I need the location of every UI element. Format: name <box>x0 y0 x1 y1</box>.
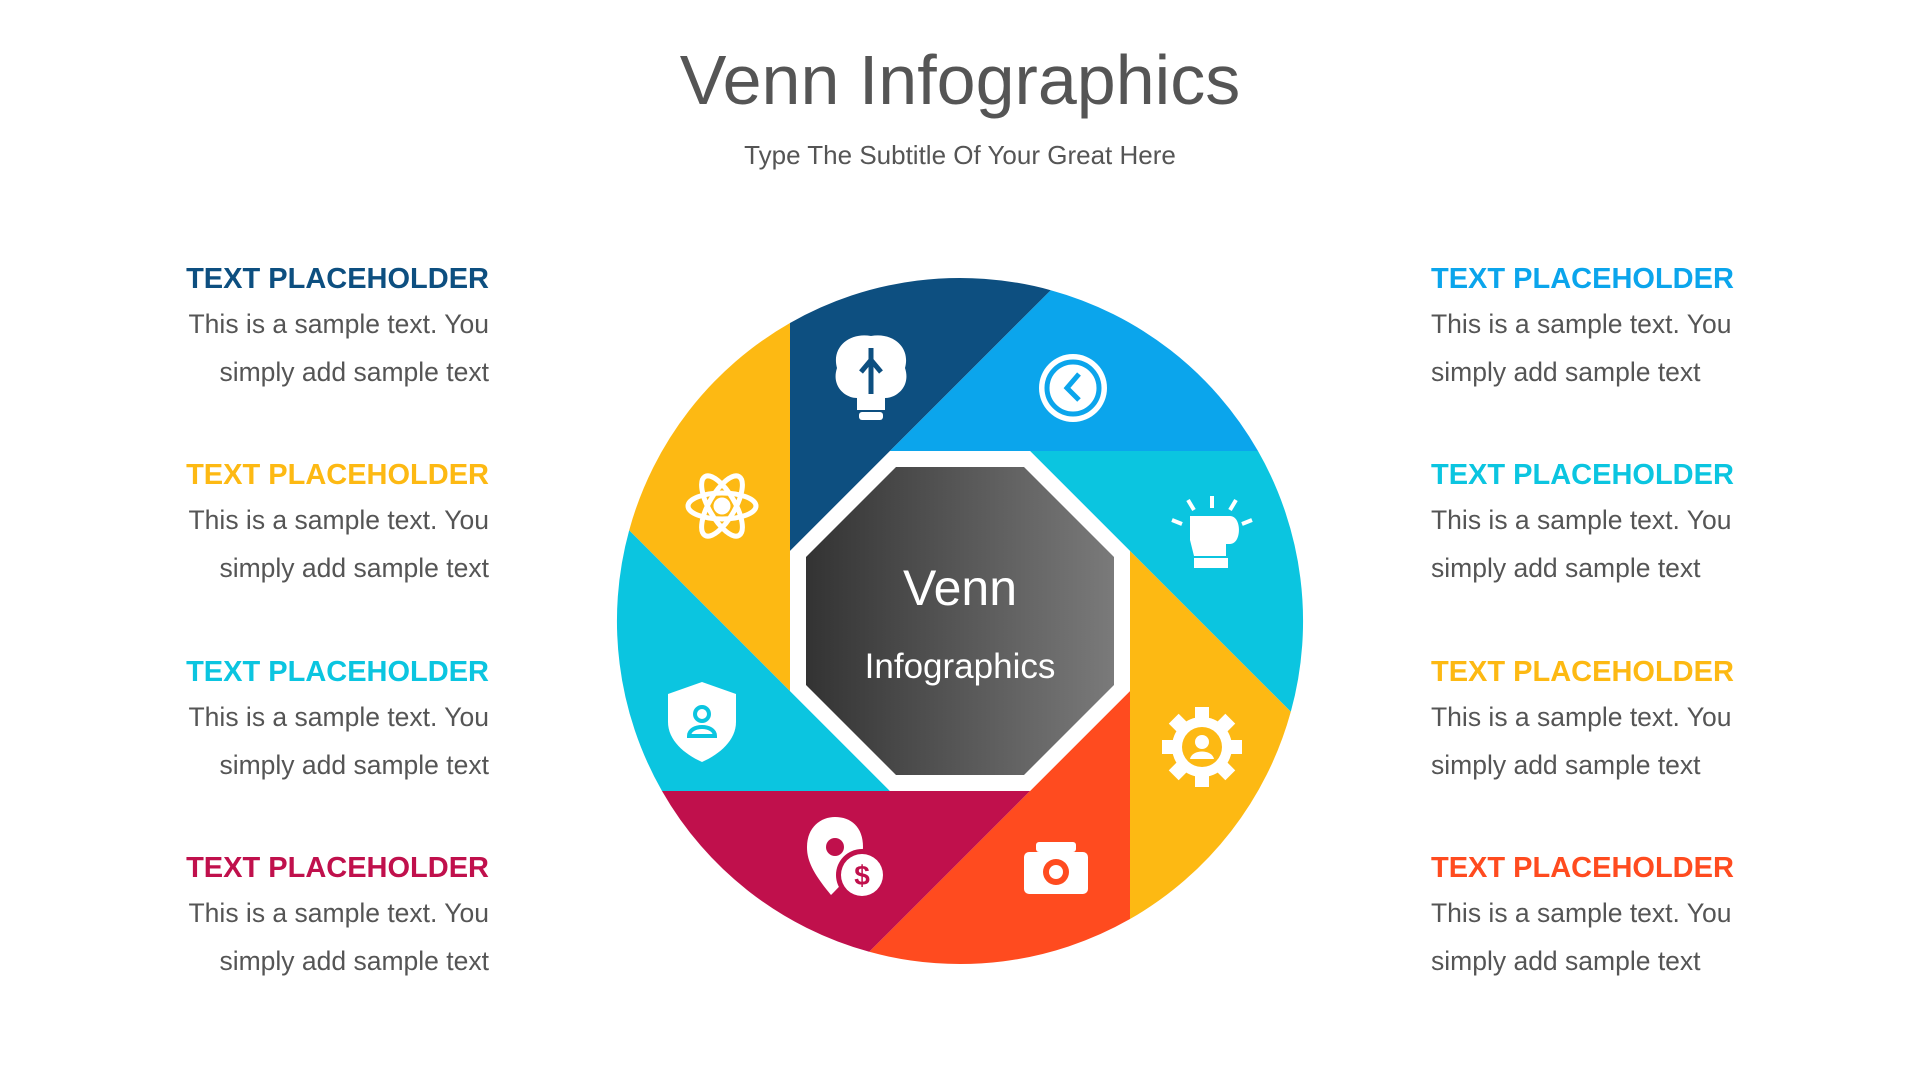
icon: gear person <box>1162 707 1242 787</box>
right text block 1: simply add sample text <box>1431 357 1701 387</box>
segment: cyan left <box>617 530 890 791</box>
right text block 1: This is a sample text. You <box>1431 309 1732 339</box>
segment: cyan right <box>1030 451 1303 712</box>
left text block 1: TEXT PLACEHOLDER <box>186 263 489 295</box>
white octagon border <box>790 451 1130 791</box>
title: Venn Infographics <box>680 41 1240 119</box>
right text block 3: TEXT PLACEHOLDER <box>1431 656 1734 688</box>
segment: navy <box>790 278 1051 551</box>
left text block 2 <box>186 459 490 583</box>
left text block 4: TEXT PLACEHOLDER <box>186 852 489 884</box>
left text block 3: simply add sample text <box>219 750 490 780</box>
icon: pin dollar <box>807 817 888 901</box>
right text block 2: TEXT PLACEHOLDER <box>1431 459 1734 491</box>
segment: blue <box>890 290 1258 451</box>
left text block 2: simply add sample text <box>219 553 490 583</box>
center octagon: Venn <box>903 560 1017 616</box>
right text block 4: simply add sample text <box>1431 946 1701 976</box>
left text block 1: This is a sample text. You <box>188 309 489 339</box>
left text block 3: TEXT PLACEHOLDER <box>186 656 489 688</box>
right text block 3 <box>1431 656 1734 780</box>
right text block 1: TEXT PLACEHOLDER <box>1431 263 1734 295</box>
left text block 1 <box>186 263 490 387</box>
center octagon <box>806 467 1114 775</box>
left text block 4 <box>186 852 490 976</box>
left text block 2: TEXT PLACEHOLDER <box>186 459 489 491</box>
right text block 1 <box>1431 263 1734 387</box>
left text block 1: simply add sample text <box>219 357 490 387</box>
icon: clock <box>1039 354 1107 422</box>
segment: yellow right <box>1130 551 1291 919</box>
left text block 2: This is a sample text. You <box>188 505 489 535</box>
right text block 4: This is a sample text. You <box>1431 898 1732 928</box>
subtitle: Type The Subtitle Of Your Great Here <box>744 140 1176 170</box>
right text block 2: simply add sample text <box>1431 553 1701 583</box>
icon: shield <box>668 682 736 762</box>
segment: orange <box>869 691 1130 964</box>
left text block 3 <box>186 656 490 780</box>
icon: camera <box>1024 842 1088 894</box>
icon: fist <box>1172 496 1252 568</box>
center octagon: Infographics <box>865 647 1055 686</box>
icon: atom <box>688 470 756 542</box>
segment: yellow left <box>629 323 790 691</box>
icon: pin dollar: $ <box>854 860 870 891</box>
segment: crimson <box>662 791 1030 952</box>
pinwheel circle diagram <box>617 278 1303 964</box>
right text block 4: TEXT PLACEHOLDER <box>1431 852 1734 884</box>
icon: brain bulb <box>836 335 906 420</box>
right text block 2: This is a sample text. You <box>1431 505 1732 535</box>
left text block 4: simply add sample text <box>219 946 490 976</box>
left text block 4: This is a sample text. You <box>188 898 489 928</box>
right text block 4 <box>1431 852 1734 976</box>
right text block 2 <box>1431 459 1734 583</box>
left text block 3: This is a sample text. You <box>188 702 489 732</box>
right text block 3: simply add sample text <box>1431 750 1701 780</box>
right text block 3: This is a sample text. You <box>1431 702 1732 732</box>
